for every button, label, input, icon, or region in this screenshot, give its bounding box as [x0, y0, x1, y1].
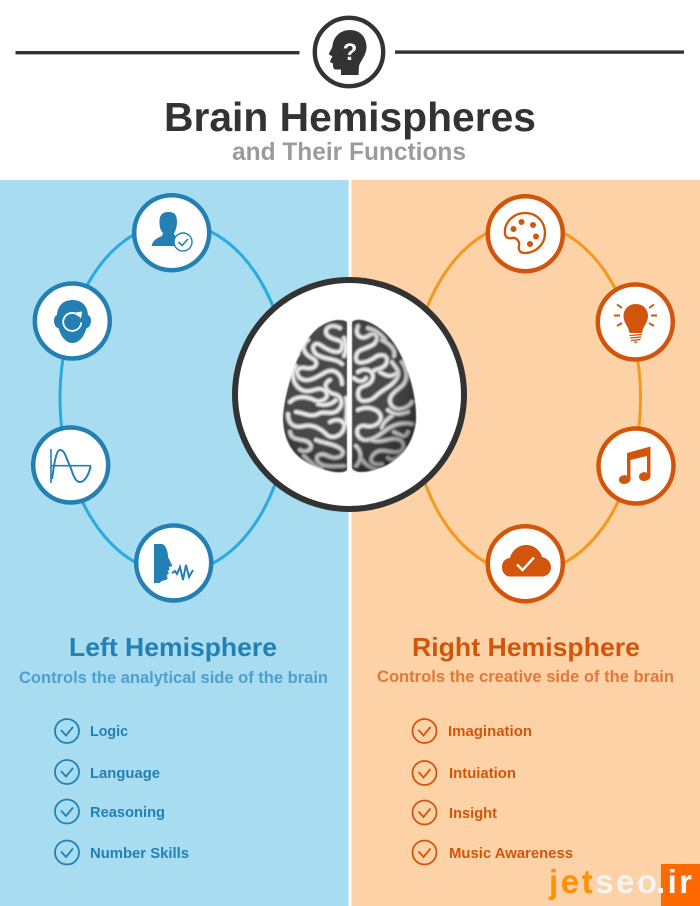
- list: right hemisphere functions: [412, 719, 573, 864]
- background panel: left hemisphere: [0, 180, 348, 906]
- list item: Insight: [412, 800, 497, 824]
- icon: head with refresh arrow: [35, 284, 110, 358]
- list item: Number Skills: [55, 840, 189, 864]
- description: right hemisphere: Controls the creative side of the brain: [377, 668, 674, 686]
- list item: Logic: [55, 719, 128, 743]
- list item: Music Awareness: Music Awareness: [449, 846, 573, 862]
- list item: Logic: Logic: [90, 724, 128, 740]
- watermark: jetseo.ir: [548, 863, 700, 906]
- list item: Insight: Insight: [449, 806, 497, 822]
- list item: Reasoning: [55, 800, 165, 824]
- icon: speaking head: [136, 526, 211, 600]
- ring: right hemisphere: [410, 223, 640, 573]
- list item: Reasoning: Reasoning: [90, 805, 165, 821]
- background panel: right hemisphere: [352, 180, 700, 906]
- icon: head with question mark: [315, 18, 383, 86]
- icon: sine wave: [33, 428, 108, 502]
- watermark: jetseo.ir: .ir: [656, 863, 692, 900]
- icon: head with question mark: ?: [343, 39, 357, 66]
- heading: right hemisphere: Right Hemisphere: [412, 632, 640, 662]
- brain illustration: [280, 315, 420, 477]
- header rule: right: [395, 50, 684, 54]
- heading: left hemisphere: Left Hemisphere: [69, 632, 277, 662]
- list item: Imagination: [412, 719, 532, 743]
- header rule: left: [16, 51, 300, 54]
- icon: music note: [598, 428, 674, 504]
- icon: palette: [488, 196, 563, 271]
- list item: Intuiation: Intuiation: [449, 766, 516, 782]
- description: left hemisphere: Controls the analytical side of the brain: [19, 669, 328, 687]
- icon: light bulb: [598, 284, 673, 360]
- central brain circle: [235, 280, 464, 509]
- list item: Language: Language: [90, 766, 160, 782]
- watermark: jetseo.ir: jetseo: [548, 863, 657, 900]
- subtitle: and Their Functions: [232, 138, 466, 166]
- list item: Imagination: Imagination: [448, 724, 532, 740]
- list item: Number Skills: Number Skills: [90, 846, 189, 862]
- icon: person with check: [134, 195, 209, 270]
- list item: Music Awareness: [412, 840, 573, 864]
- list item: Language: [55, 760, 160, 784]
- icon: cloud with check: [488, 526, 563, 601]
- ring: left hemisphere: [60, 223, 290, 573]
- list: left hemisphere functions: [55, 719, 189, 864]
- list item: Intuiation: [412, 761, 516, 785]
- title: Brain Hemispheres: [164, 94, 536, 140]
